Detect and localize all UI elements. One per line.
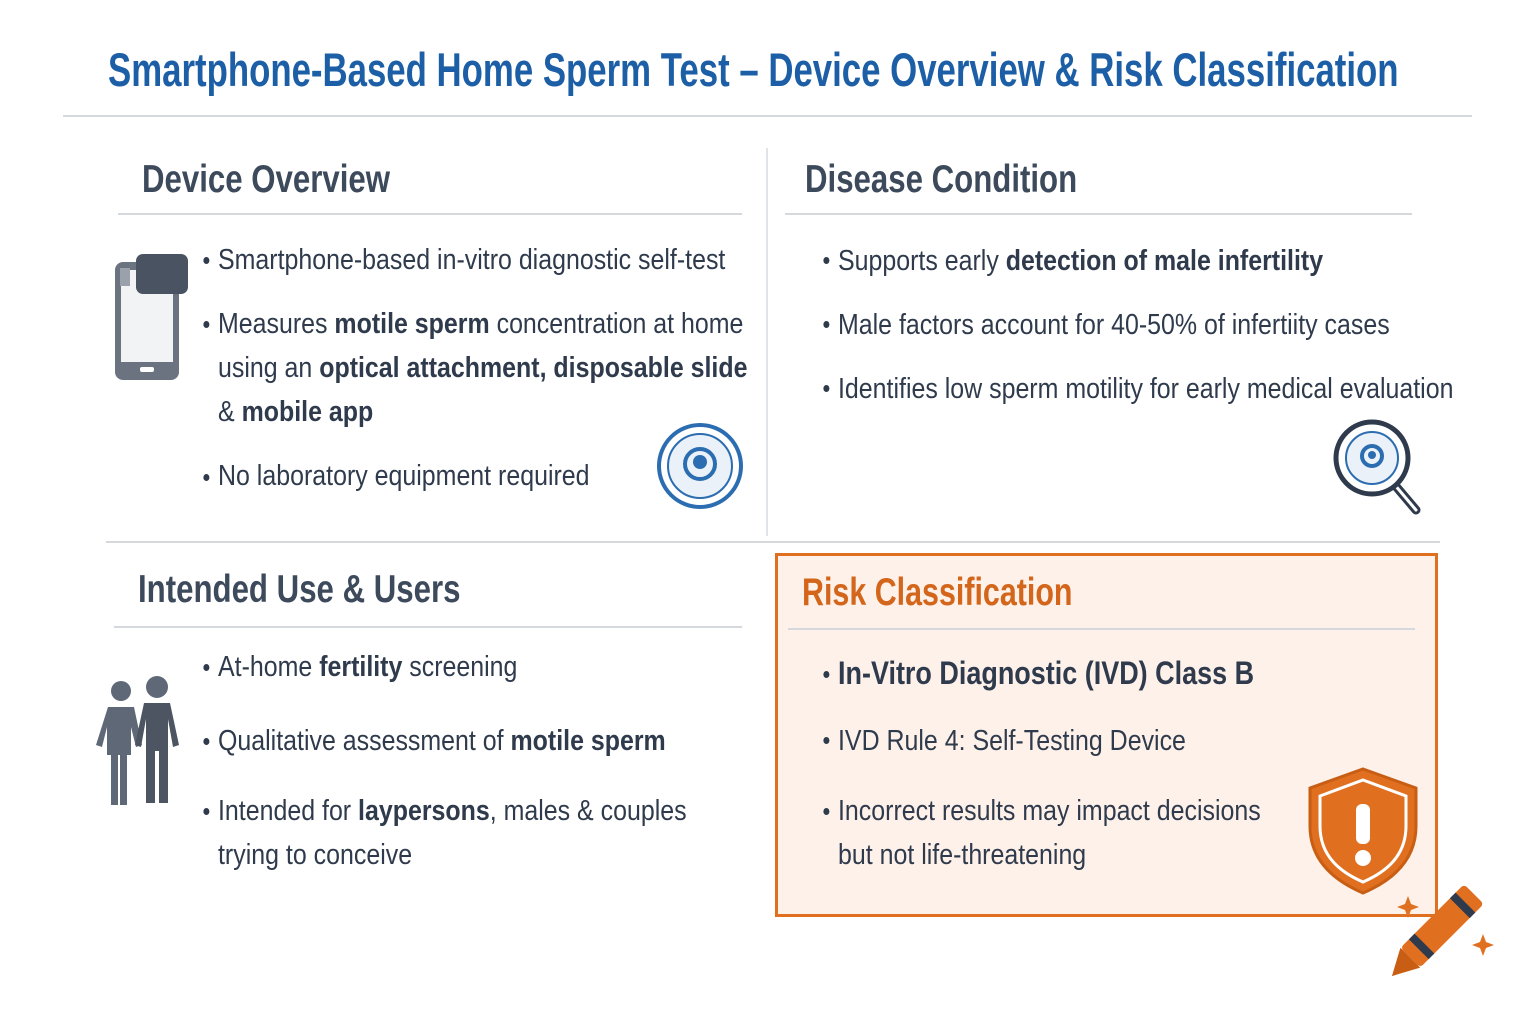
intended use bullets: Qualitative assessment of motile sperm bbox=[218, 725, 666, 757]
device overview bullets bbox=[203, 244, 747, 492]
intended use bullets bbox=[203, 651, 687, 871]
panel: intended use bbox=[96, 568, 742, 871]
panel: device overview bbox=[115, 158, 747, 509]
risk bullets: IVD Rule 4: Self-Testing Device bbox=[838, 725, 1186, 757]
risk bullets: Incorrect results may impact decisions bbox=[838, 795, 1261, 827]
title: Smartphone-Based Home Sperm Test – Device Overview & Risk Classification bbox=[108, 43, 1399, 96]
icon: target bbox=[657, 423, 743, 509]
risk bullets bbox=[823, 655, 1261, 871]
icon: magnifier bbox=[1334, 420, 1420, 514]
intended use bullets: trying to conceive bbox=[218, 839, 412, 871]
heading: device overview: Device Overview bbox=[142, 158, 390, 201]
icon: crayon bbox=[1392, 886, 1494, 976]
heading: disease condition: Disease Condition bbox=[805, 158, 1077, 201]
disease bullets: Male factors account for 40-50% of infertiity cases bbox=[838, 309, 1390, 341]
intended use bullets: Intended for laypersons, males & couples bbox=[218, 795, 687, 827]
icon: people bbox=[96, 676, 179, 805]
panel: disease condition bbox=[785, 158, 1453, 514]
heading: risk classification: Risk Classification bbox=[802, 571, 1073, 614]
disease bullets: Supports early detection of male infertility bbox=[838, 245, 1323, 277]
risk bullets: In-Vitro Diagnostic (IVD) Class B bbox=[838, 655, 1254, 691]
device overview bullets: & mobile app No laboratory equipment required bbox=[218, 396, 590, 492]
heading: intended use: Intended Use & Users bbox=[138, 568, 460, 611]
icon: phone bbox=[115, 254, 188, 380]
device overview bullets: using an optical attachment, disposable slide bbox=[218, 352, 747, 384]
panel: risk classification bbox=[775, 553, 1438, 917]
device overview bullets: Smartphone-based in-vitro diagnostic self-test bbox=[218, 244, 725, 276]
device overview bullets: Measures motile sperm concentration at home bbox=[218, 308, 743, 340]
disease bullets: Identifies low sperm motility for early medical evaluation bbox=[838, 373, 1453, 405]
disease bullets bbox=[823, 245, 1453, 405]
intended use bullets: At-home fertility screening bbox=[218, 651, 517, 683]
icon: shield bbox=[1308, 767, 1418, 895]
risk bullets: but not life-threatening bbox=[838, 839, 1086, 871]
